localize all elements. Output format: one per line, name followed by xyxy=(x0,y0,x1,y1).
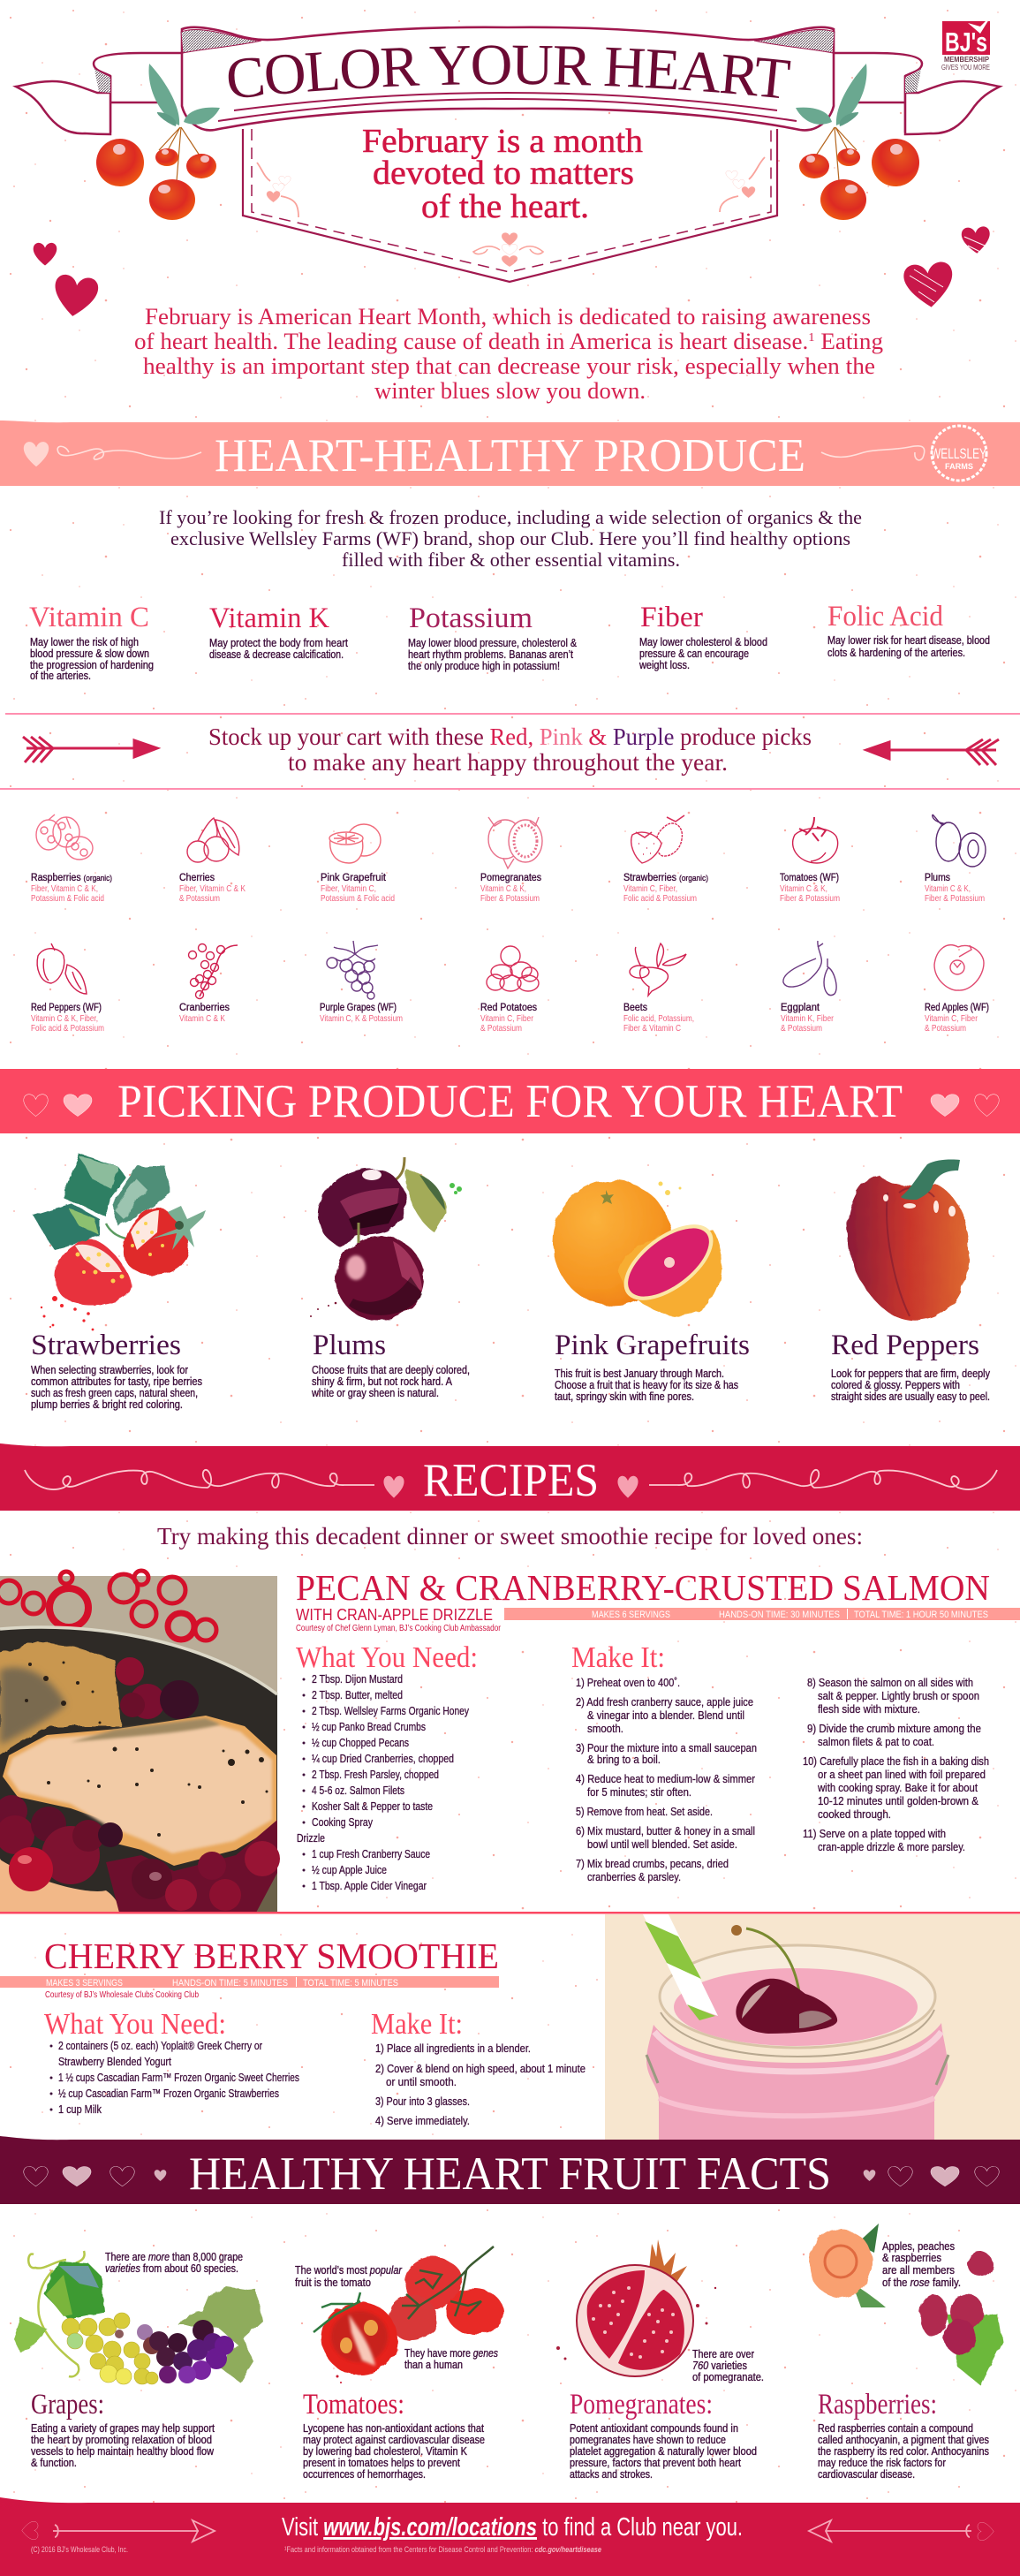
produce: plums: Fiber & Potassium xyxy=(925,893,985,904)
footnote: ¹Facts and information obtained from the Centers for Disease Control and Prevention: cdc.gov/heartdisease xyxy=(284,2545,602,2555)
produce: eggplant: Vitamin K, Fiber xyxy=(781,1013,834,1024)
cherries left xyxy=(96,64,220,220)
section band: recipes xyxy=(0,1443,1020,1511)
salmon method: flesh side with mixture. xyxy=(818,1702,920,1716)
nutrient: Vitamin C xyxy=(29,602,154,682)
main ribbon shape xyxy=(182,27,834,130)
produce: eggplant: & Potassium xyxy=(781,1023,822,1034)
fact text: pomegranates: pomegranates have shown to reduce xyxy=(570,2434,726,2446)
raspberries caption xyxy=(882,2240,961,2289)
raspberries caption: are all members xyxy=(882,2264,955,2277)
nutrient: Vitamin C: May lower the risk of high xyxy=(30,636,139,648)
produce: strawberries xyxy=(623,815,708,904)
tomatoes captions: The world’s most popular xyxy=(295,2264,403,2277)
produce card text: pink grapefruits: This fruit is best January through March. xyxy=(555,1368,724,1380)
produce: red potatoes: & Potassium xyxy=(480,1023,522,1034)
nutrient: Fiber xyxy=(638,602,767,671)
produce: red potatoes: Vitamin C, Fiber xyxy=(480,1013,533,1024)
produce: tomatoes: Fiber & Potassium xyxy=(780,893,840,904)
fact text: raspberries: Red raspberries contain a compound xyxy=(818,2422,973,2435)
smoothie ingredients: What You Need: xyxy=(44,2008,226,2041)
produce: tomatoes: Tomatoes (WF) xyxy=(780,873,839,883)
BJ's logo: GIVES YOU MORE xyxy=(941,64,990,72)
watercolor: plums xyxy=(310,1157,462,1321)
heading: HEALTHY HEART FRUIT FACTS xyxy=(189,2148,831,2200)
section band: heart-healthy produce xyxy=(0,420,1020,486)
pocket panel xyxy=(243,123,777,282)
salmon method: with cooking spray. Bake it for about xyxy=(817,1781,978,1794)
smoothie method: or until smooth. xyxy=(386,2075,457,2088)
nutrient: Fiber: May lower cholesterol & blood xyxy=(639,636,767,648)
salmon method: 4) Reduce heat to medium-low & simmer xyxy=(576,1772,756,1785)
intro paragraph: of heart health. The leading cause of death in America is heart disease. xyxy=(134,329,782,354)
smoothie ingredients: Strawberry Blended Yogurt xyxy=(58,2055,171,2068)
title: COLOR YOUR HEART xyxy=(228,45,791,98)
produce: red potatoes xyxy=(480,946,539,1034)
intro paragraph: Eating xyxy=(815,329,883,354)
produce: red peppers: Red Peppers (WF) xyxy=(31,1003,102,1013)
salmon ingredients: Kosher Salt & Pepper to taste xyxy=(312,1799,433,1813)
watercolor: grapes xyxy=(13,2251,262,2384)
produce: red apples: & Potassium xyxy=(925,1023,966,1034)
salmon ingredients: ½ cup Panko Bread Crumbs xyxy=(312,1720,426,1733)
tomatoes captions xyxy=(295,2264,498,2371)
produce: pomegranates: Vitamin C & K, xyxy=(480,883,526,894)
salmon recipe header: MAKES 6 SERVINGS xyxy=(592,1610,670,1620)
salmon method: Make It: xyxy=(571,1641,665,1674)
produce: pink grapefruit: Potassium & Folic acid xyxy=(321,893,395,904)
fact text: grapes: & function. xyxy=(31,2457,77,2469)
produce card text: red peppers: straight sides are usually easy to peel. xyxy=(831,1390,990,1403)
grapes caption: varieties from about 60 species. xyxy=(105,2262,238,2275)
fact text: raspberries xyxy=(818,2389,989,2481)
produce intro text: If you’re looking for fresh & frozen produce, including a wide selection of organics & the xyxy=(159,506,862,528)
watercolor: tomatoes xyxy=(314,2246,503,2383)
grapes caption xyxy=(105,2251,243,2275)
nutrient: Folic Acid xyxy=(827,601,990,659)
produce: red potatoes: Red Potatoes xyxy=(480,1003,537,1013)
arrow: right xyxy=(866,739,999,765)
pocket outline xyxy=(243,129,777,282)
footer arrow right xyxy=(809,2520,994,2542)
salmon ingredients: ¼ cup Dried Cranberries, chopped xyxy=(312,1752,454,1765)
salmon method: 11) Serve on a plate topped with xyxy=(803,1827,946,1840)
footer band xyxy=(0,2497,1020,2576)
smoothie recipe header: MAKES 3 SERVINGS xyxy=(46,1978,123,1989)
produce card text: red peppers: Red Peppers xyxy=(831,1330,979,1361)
salmon ingredients: 2 Tbsp. Wellsley Farms Organic Honey xyxy=(312,1704,469,1717)
salmon method: bowl until well blended. Set aside. xyxy=(587,1837,737,1851)
fact text: grapes: the heart by promoting relaxation of blood xyxy=(31,2434,212,2446)
ribbon hatch left xyxy=(181,29,261,53)
produce: strawberries: Vitamin C, Fiber, xyxy=(623,883,677,894)
salmon method: cran-apple drizzle & more parsley. xyxy=(818,1840,965,1853)
tomatoes captions: They have more genes xyxy=(404,2347,498,2360)
copyright: (C) 2016 BJ’s Wholesale Club, Inc. xyxy=(31,2545,128,2555)
intro paragraph: winter blues slow you down. xyxy=(374,378,646,404)
footer CTA: Visit www.bjs.com/locations to find a Club near you. xyxy=(282,2513,743,2542)
produce card text: strawberries: Strawberries xyxy=(31,1330,181,1361)
heading: RECIPES xyxy=(423,1455,599,1506)
produce: purple grapes: Vitamin C, K & Potassium xyxy=(320,1013,403,1024)
fact text: raspberries: may reduce the risk factors for xyxy=(818,2457,946,2469)
smoothie recipe header xyxy=(0,1936,499,2000)
raspberries caption: Apples, peaches xyxy=(882,2240,955,2253)
salmon method: 3) Pour the mixture into a small saucepan xyxy=(576,1741,757,1754)
produce: red apples: Vitamin C, Fiber xyxy=(925,1013,978,1024)
salmon method: 10) Carefully place the fish in a baking dish xyxy=(803,1754,989,1768)
salmon ingredients: 4 5-6 oz. Salmon Filets xyxy=(312,1784,404,1797)
nutrient: Fiber: weight loss. xyxy=(638,659,690,671)
produce: beets xyxy=(623,943,694,1034)
ornament left xyxy=(257,163,298,217)
salmon method: & vinegar into a blender. Blend until xyxy=(587,1708,744,1722)
scribble hearts xyxy=(34,226,991,319)
watercolor: pink grapefruit xyxy=(553,1180,726,1315)
produce: cherries: Cherries xyxy=(179,873,215,883)
pomegranate caption xyxy=(692,2348,764,2383)
produce: pink grapefruit: Pink Grapefruit xyxy=(321,873,387,883)
Wellsley Farms badge xyxy=(931,426,986,481)
produce: raspberries xyxy=(31,814,112,904)
flourish left xyxy=(25,1470,374,1489)
pocket headline xyxy=(362,123,643,225)
pocket stitching xyxy=(252,129,771,272)
nutrient: Fiber: pressure & can encourage xyxy=(639,648,749,660)
salmon method xyxy=(571,1641,989,1883)
fact text: raspberries: cardiovascular disease. xyxy=(818,2468,915,2481)
produce card text: pink grapefruits xyxy=(555,1330,750,1403)
smoothie ingredients: 1 ½ cups Cascadian Farm™ Frozen Organic Sweet Cherries xyxy=(58,2071,299,2084)
produce: red peppers: Folic acid & Potassium xyxy=(31,1023,104,1034)
intro paragraph: February is American Heart Month, which is dedicated to raising awareness xyxy=(145,304,871,330)
salmon recipe header: TOTAL TIME: 1 HOUR 50 MINUTES xyxy=(854,1610,988,1620)
ribbon hatch right xyxy=(754,29,835,53)
band icon: heart xyxy=(24,442,49,466)
smoothie method: 4) Serve immediately. xyxy=(375,2114,470,2127)
produce: purple grapes: Purple Grapes (WF) xyxy=(320,1003,397,1013)
produce: cherries: & Potassium xyxy=(179,893,220,904)
smoothie method: 3) Pour into 3 glasses. xyxy=(375,2095,470,2108)
salmon method: cooked through. xyxy=(818,1807,891,1821)
smoothie method xyxy=(371,2008,586,2127)
BJ's logo: MEMBERSHIP xyxy=(944,56,990,64)
produce: pomegranates: Fiber & Potassium xyxy=(480,893,540,904)
fact text: tomatoes xyxy=(303,2389,485,2481)
smoothie recipe header: CHERRY BERRY SMOOTHIE xyxy=(44,1936,499,1976)
salmon method: & bring to a boil. xyxy=(587,1753,661,1766)
produce card text: strawberries xyxy=(31,1330,202,1411)
Wellsley Farms badge: FARMS xyxy=(945,462,973,471)
produce: pomegranates xyxy=(480,817,542,904)
raspberries caption: of the rose family. xyxy=(882,2277,961,2289)
fact text: raspberries: the raspberry its red color. Anthocyanins xyxy=(818,2445,989,2458)
produce intro text: filled with fiber & other essential vitamins. xyxy=(342,549,680,571)
heart xyxy=(383,1476,404,1498)
nutrient: Vitamin C: the progression of hardening xyxy=(30,659,154,671)
tomatoes captions: than a human xyxy=(404,2359,463,2371)
intro paragraph xyxy=(134,304,883,404)
heading: PICKING PRODUCE FOR YOUR HEART xyxy=(117,1076,903,1127)
grapes caption: There are more than 8,000 grape xyxy=(105,2251,243,2263)
smoothie ingredients: 2 containers (5 oz. each) Yoplait® Greek Cherry or xyxy=(58,2039,263,2052)
salmon method: salt & pepper. Lightly brush or spoon xyxy=(818,1689,979,1702)
salmon recipe header: WITH CRAN-APPLE DRIZZLE xyxy=(296,1606,493,1624)
produce card text: plums: Plums xyxy=(313,1330,386,1361)
cherries right xyxy=(796,64,919,220)
watercolor: strawberries xyxy=(33,1155,206,1330)
produce card text: strawberries: When selecting strawberries, look for xyxy=(31,1364,188,1376)
intro paragraph: healthy is an important step that can decrease your risk, especially when the xyxy=(143,353,875,379)
produce: raspberries: Raspberries (organic) xyxy=(31,873,112,883)
pomegranate caption: 760 varieties xyxy=(692,2360,747,2372)
nutrient: Folic Acid: Folic Acid xyxy=(827,601,943,633)
nutrient: Vitamin K: May protect the body from heart xyxy=(209,637,348,649)
produce card text: pink grapefruits: Pink Grapefruits xyxy=(555,1330,750,1361)
section band: fruit facts xyxy=(0,2136,1020,2204)
nutrient: Vitamin K: disease & decrease calcification. xyxy=(209,648,344,661)
produce: red apples xyxy=(925,945,989,1034)
produce intro text: exclusive Wellsley Farms (WF) brand, shop our Club. Here you’ll find healthy options xyxy=(170,527,850,549)
fact text: raspberries: Raspberries: xyxy=(818,2389,937,2421)
produce: eggplant: Eggplant xyxy=(781,1003,820,1013)
smoothie method: Make It: xyxy=(371,2008,463,2041)
produce card text: plums: white or gray sheen is natural. xyxy=(311,1387,439,1399)
produce intro text xyxy=(159,506,862,571)
produce: cranberries: Cranberries xyxy=(179,1003,230,1013)
produce: raspberries: Fiber, Vitamin C & K, xyxy=(31,883,98,894)
left ribbon tail xyxy=(16,53,182,134)
nutrient: Folic Acid: clots & hardening of the arteries. xyxy=(827,647,965,659)
nutrient: Vitamin C: Vitamin C xyxy=(29,602,149,633)
produce: beets: Folic acid, Potassium, xyxy=(623,1013,694,1024)
produce: red peppers: Vitamin C & K, Fiber, xyxy=(31,1013,98,1024)
produce card text: plums: Choose fruits that are deeply colored, xyxy=(312,1364,470,1376)
nutrient: Potassium: heart rhythm problems. Bananas aren’t xyxy=(408,648,573,661)
salmon method: cranberries & parsley. xyxy=(587,1870,681,1883)
nutrient: Potassium: the only produce high in potassium! xyxy=(408,660,560,672)
smoothie recipe header: HANDS-ON TIME: 5 MINUTES xyxy=(172,1978,288,1989)
pocket headline: February is a month xyxy=(362,123,643,160)
photo: smoothie xyxy=(605,1914,1020,2140)
nutrient: Vitamin C: of the arteries. xyxy=(30,670,91,682)
salmon recipe header xyxy=(296,1567,1020,1633)
flourish right xyxy=(649,1470,997,1489)
salmon method: 10-12 minutes until golden-brown & xyxy=(818,1794,978,1807)
stock-up text xyxy=(208,724,812,776)
produce: cranberries xyxy=(179,943,238,1024)
photo: salmon xyxy=(0,1571,280,1913)
salmon method: 9) Divide the crumb mixture among the xyxy=(807,1722,981,1735)
produce: pomegranates: Pomegranates xyxy=(480,873,541,883)
ribbon lines xyxy=(218,93,797,121)
fact text: pomegranates: attacks and strokes. xyxy=(570,2468,653,2481)
produce: strawberries: Strawberries (organic) xyxy=(623,873,708,883)
produce: raspberries: Potassium & Folic acid xyxy=(31,893,104,904)
band hearts xyxy=(24,2166,999,2186)
salmon method: 5) Remove from heat. Set aside. xyxy=(576,1805,713,1818)
salmon ingredients: ½ cup Apple Juice xyxy=(312,1863,387,1876)
produce grid xyxy=(31,814,989,1034)
salmon ingredients: 2 Tbsp. Butter, melted xyxy=(312,1688,403,1701)
produce: strawberries: Folic acid & Potassium xyxy=(623,893,697,904)
produce: tomatoes xyxy=(780,817,840,904)
salmon time bar xyxy=(504,1608,1020,1620)
salmon method: or a sheet pan lined with foil prepared xyxy=(818,1768,986,1781)
produce: red apples: Red Apples (WF) xyxy=(925,1003,989,1013)
produce: cherries: Fiber, Vitamin C & K xyxy=(179,883,246,894)
fact text: tomatoes: present in tomatoes helps to prevent xyxy=(303,2457,460,2469)
nutrient: Potassium: Potassium xyxy=(409,602,533,634)
watercolor: pomegranate xyxy=(556,2239,716,2376)
produce card text: plums: shiny & firm, but not rock hard. A xyxy=(312,1375,453,1388)
produce: red peppers xyxy=(31,943,104,1034)
salmon ingredients: 2 Tbsp. Dijon Mustard xyxy=(312,1672,403,1686)
produce: plums xyxy=(925,814,986,904)
produce card text: pink grapefruits: Choose a fruit that is heavy for its size & has xyxy=(555,1379,738,1391)
BJ's logo: BJ's xyxy=(945,27,987,57)
smoothie method: 2) Cover & blend on high speed, about 1 minute xyxy=(375,2062,586,2075)
stock-up text: to make any heart happy throughout the year. xyxy=(288,749,728,776)
fact text: grapes: vessels to help maintain healthy blood flow xyxy=(31,2445,215,2458)
produce card text: pink grapefruits: taut, springy skin with fine pores. xyxy=(555,1390,694,1403)
smoothie ingredients: ½ cup Cascadian Farm™ Frozen Organic Strawberries xyxy=(58,2087,279,2100)
salmon ingredients: 1 Tbsp. Apple Cider Vinegar xyxy=(312,1879,427,1892)
fact text: tomatoes: may protect against cardiovascular disease xyxy=(303,2434,485,2446)
produce: beets: Beets xyxy=(623,1003,647,1013)
ornament bottom xyxy=(473,233,543,267)
produce card text: plums xyxy=(311,1330,470,1399)
fact text: grapes: Eating a variety of grapes may help support xyxy=(31,2422,215,2435)
produce: purple grapes xyxy=(320,941,403,1024)
produce: pink grapefruit xyxy=(321,824,395,904)
salmon method: 6) Mix mustard, butter & honey in a small xyxy=(576,1824,755,1837)
fact text: tomatoes: Tomatoes: xyxy=(303,2389,404,2421)
nutrient: Vitamin K xyxy=(209,602,348,661)
produce: cherries xyxy=(179,818,246,904)
salmon ingredients: 1 cup Fresh Cranberry Sauce xyxy=(312,1847,430,1860)
stock-up text: Stock up your cart with these Red, Pink & Purple produce picks xyxy=(208,724,812,750)
produce: cranberries: Vitamin C & K xyxy=(179,1013,225,1024)
smoothie recipe header: Courtesy of BJ’s Wholesale Clubs Cooking Club xyxy=(45,1989,199,2000)
flourishes xyxy=(57,446,925,460)
salmon ingredients: 2 Tbsp. Fresh Parsley, chopped xyxy=(312,1768,439,1781)
fact text: pomegranates: pressure, factors that prevent both heart xyxy=(570,2457,741,2469)
intro paragraph: 1 xyxy=(808,331,815,345)
section band: picking produce xyxy=(0,1069,1020,1133)
pomegranate caption: There are over xyxy=(692,2348,754,2360)
fact text: pomegranates: platelet aggregation & naturally lower blood xyxy=(570,2445,757,2458)
Wellsley Farms badge: WELLSLEY xyxy=(931,445,986,462)
salmon method: 1) Preheat oven to 400˚. xyxy=(576,1676,680,1689)
salmon ingredients: Drizzle xyxy=(297,1831,325,1845)
heading: HEART-HEALTHY PRODUCE xyxy=(215,430,805,481)
tomatoes captions: fruit is the tomato xyxy=(295,2277,371,2289)
smoothie method: 1) Place all ingredients in a blender. xyxy=(375,2042,531,2055)
produce card text: strawberries: plump berries & bright red coloring. xyxy=(31,1398,183,1411)
BJ's logo xyxy=(941,15,992,72)
salmon method: 8) Season the salmon on all sides with xyxy=(807,1676,973,1689)
fact text: raspberries: called anthocyanin, a pigment that gives xyxy=(818,2434,989,2446)
fact text: pomegranates xyxy=(570,2389,757,2481)
watercolor: rose and raspberries xyxy=(809,2224,1002,2385)
ornament right xyxy=(720,157,765,212)
watercolor: red pepper xyxy=(848,1160,969,1321)
fact text: pomegranates: Potent antioxidant compounds found in xyxy=(570,2422,738,2435)
salmon recipe header: PECAN & CRANBERRY-CRUSTED SALMON xyxy=(296,1567,990,1608)
salmon ingredients: ½ cup Chopped Pecans xyxy=(312,1736,409,1749)
produce: pink grapefruit: Fiber, Vitamin C, xyxy=(321,883,376,894)
fact text: tomatoes: Lycopene has non-antioxidant actions that xyxy=(303,2422,484,2435)
heart xyxy=(617,1476,638,1498)
band hearts xyxy=(24,1095,999,1117)
produce card text: red peppers: colored & glossy. Peppers with xyxy=(831,1379,960,1391)
nutrient: Folic Acid: May lower risk for heart disease, blood xyxy=(827,634,990,647)
smoothie ingredients: 1 cup Milk xyxy=(58,2102,102,2116)
salmon ingredients: Cooking Spray xyxy=(312,1815,373,1829)
salmon method: 2) Add fresh cranberry sauce, apple juice xyxy=(576,1695,753,1708)
salmon method: salmon filets & pat to coat. xyxy=(818,1735,934,1748)
produce card text: red peppers xyxy=(831,1330,991,1403)
pomegranate caption: of pomegranate. xyxy=(692,2371,764,2383)
produce card text: strawberries: common attributes for tasty, ripe berries xyxy=(31,1375,202,1388)
nutrient: Potassium xyxy=(408,602,578,672)
smoothie recipe header: TOTAL TIME: 5 MINUTES xyxy=(303,1978,398,1989)
produce: plums: Vitamin C & K, xyxy=(925,883,971,894)
produce: plums: Plums xyxy=(925,873,950,883)
produce: beets: Fiber & Vitamin C xyxy=(623,1023,681,1034)
salmon method: 7) Mix bread crumbs, pecans, dried xyxy=(576,1857,729,1870)
header banner ribbon xyxy=(12,27,1003,170)
salmon method: for 5 minutes; stir often. xyxy=(587,1785,691,1799)
smoothie time bar xyxy=(0,1976,499,1988)
fact text: pomegranates: Pomegranates: xyxy=(570,2389,713,2421)
nutrient: Vitamin C: blood pressure & slow down xyxy=(30,648,149,660)
salmon ingredients xyxy=(296,1641,478,1892)
salmon recipe header: Courtesy of Chef Glenn Lyman, BJ’s Cooking Club Ambassador xyxy=(296,1623,501,1633)
raspberries caption: & raspberries xyxy=(882,2252,941,2264)
fact text: tomatoes: occurrences of hemorrhages. xyxy=(303,2468,426,2481)
salmon method: smooth. xyxy=(587,1722,623,1735)
produce: eggplant xyxy=(781,941,836,1034)
produce card text: strawberries: such as fresh green caps, natural sheen, xyxy=(31,1387,198,1399)
fact text: grapes: Grapes: xyxy=(31,2389,104,2421)
fact text: grapes xyxy=(31,2389,215,2469)
arrow: left xyxy=(23,737,157,762)
produce card text: red peppers: Look for peppers that are firm, deeply xyxy=(831,1368,991,1380)
nutrient: Potassium: May lower blood pressure, cholesterol & xyxy=(408,637,578,649)
pocket headline: of the heart. xyxy=(421,188,589,225)
salmon ingredients: What You Need: xyxy=(296,1641,478,1674)
footer arrow left xyxy=(22,2520,215,2542)
salmon recipe header: HANDS-ON TIME: 30 MINUTES xyxy=(719,1610,840,1620)
fact text: tomatoes: by lowering bad cholesterol. Vitamin K xyxy=(303,2445,468,2458)
right ribbon tail xyxy=(834,53,1000,134)
pocket headline: devoted to matters xyxy=(373,155,634,192)
produce: tomatoes: Vitamin C & K, xyxy=(780,883,827,894)
smoothie ingredients xyxy=(44,2008,299,2116)
recipes intro: Try making this decadent dinner or sweet smoothie recipe for loved ones: xyxy=(157,1523,863,1549)
nutrient: Vitamin K: Vitamin K xyxy=(209,602,329,634)
nutrient: Fiber: Fiber xyxy=(640,602,703,633)
